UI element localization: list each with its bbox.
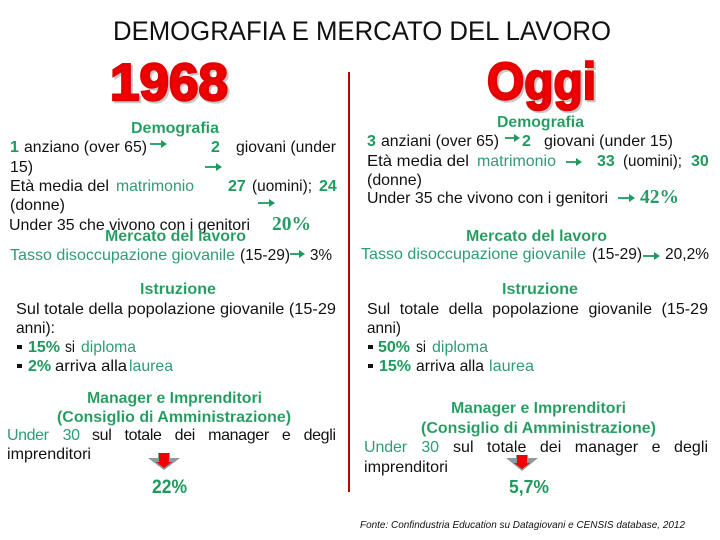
section: manager e imprenditori oggi: (Consiglio di Amministrazione) (421, 420, 656, 437)
section: istruzione oggi: anni) (367, 320, 401, 337)
section: istruzione oggi: diploma (432, 339, 488, 356)
section: istruzione oggi: Sul totale della popolazione giovanile (15-29 (367, 301, 708, 318)
section: demografia oggi: 3 (367, 133, 376, 150)
section: demografia oggi: (donne) (367, 172, 422, 189)
section: istruzione 1968: anni): (16, 320, 55, 337)
section: manager e imprenditori oggi: Manager e Imprenditori (451, 400, 626, 417)
section: demografia 1968: Demografia (131, 120, 219, 137)
section: manager e imprenditori 1968: (Consiglio di Amministrazione) (57, 409, 291, 426)
section: manager e imprenditori oggi: sul totale dei manager e degli (453, 439, 708, 456)
section: demografia 1968: 2 (211, 139, 220, 156)
panel: oggi (361, 53, 709, 497)
section: manager e imprenditori oggi: Under 30 (364, 439, 439, 456)
section: mercato del lavoro oggi: (15-29) (592, 246, 642, 263)
section: demografia 1968: (uomini); (252, 178, 312, 195)
section: istruzione 1968: 15% (28, 339, 60, 356)
section: demografia oggi: giovani (under 15) (544, 133, 673, 150)
section: manager e imprenditori 1968: sul totale dei manager e degli (92, 427, 336, 444)
section: istruzione oggi: si (416, 339, 426, 356)
title: DEMOGRAFIA E MERCATO DEL LAVORO (113, 16, 611, 46)
section: demografia oggi: Under 35 che vivono con i genitori (367, 190, 608, 207)
section: istruzione oggi: arriva alla (416, 358, 484, 375)
section: istruzione 1968: Istruzione (140, 281, 216, 298)
section: istruzione 1968: Sul totale della popolazione giovanile (15-29 (16, 301, 336, 318)
section: manager e imprenditori 1968: Manager e Imprenditori (87, 390, 262, 407)
icon: down arrow (148, 453, 180, 470)
section: manager e imprenditori oggi: 5,7% (509, 477, 549, 497)
section: demografia oggi: 42% (640, 186, 679, 208)
section: demografia 1968: giovani (under (236, 139, 337, 156)
section: mercato del lavoro oggi: Mercato del lavoro (466, 228, 607, 245)
section: istruzione oggi: 50% (378, 339, 410, 356)
section: demografia oggi: 2 (522, 133, 531, 150)
section: mercato del lavoro 1968: Mercato del lavoro (105, 228, 246, 245)
section: demografia 1968: 20% (272, 213, 311, 235)
heading: 1968: 1968 (112, 56, 230, 114)
section: demografia oggi: anziani (over 65) (381, 133, 499, 150)
section: istruzione 1968: arriva alla (55, 358, 127, 375)
section: demografia 1968: Età media del (10, 178, 109, 195)
section: demografia 1968: 15) (10, 159, 33, 176)
section: manager e imprenditori 1968: imprenditori (7, 446, 91, 463)
section: mercato del lavoro 1968 (10, 228, 332, 264)
divider: vertical red line (348, 72, 350, 492)
section: demografia oggi: (uomini); (623, 153, 682, 170)
section: mercato del lavoro 1968: (15-29) (240, 247, 290, 264)
source note: Fonte: Confindustria Education su Datagiovani e CENSIS database, 2012 (360, 519, 685, 531)
section: demografia oggi: Età media del (367, 153, 469, 170)
panel: 1968 (7, 54, 337, 498)
section: demografia 1968: 1 (10, 139, 19, 156)
section: istruzione 1968 (16, 281, 336, 375)
section: manager e imprenditori 1968: Under 30 (7, 427, 80, 444)
section: istruzione oggi (367, 281, 708, 375)
section: demografia 1968: Under 35 che vivono con i genitori (9, 217, 250, 234)
section: istruzione 1968: si (65, 339, 75, 356)
section: demografia oggi (367, 114, 709, 208)
section: istruzione 1968: laurea (129, 358, 173, 375)
section: demografia 1968: anziano (over 65) (24, 139, 147, 156)
section: demografia oggi: 33 (597, 153, 615, 170)
section: demografia 1968 (9, 120, 337, 235)
icon: down arrow (506, 455, 538, 471)
section: mercato del lavoro 1968: 3% (310, 247, 332, 264)
section: mercato del lavoro 1968: Tasso disoccupazione giovanile (10, 247, 235, 264)
section: manager e imprenditori 1968: 22% (152, 477, 187, 498)
section: istruzione oggi: laurea (489, 358, 534, 375)
section: demografia oggi: 30 (691, 153, 709, 170)
section: istruzione oggi: 15% (379, 358, 411, 375)
section: manager e imprenditori oggi (364, 400, 708, 497)
section: demografia oggi: Demografia (497, 114, 584, 131)
section: istruzione 1968: 2% (28, 358, 51, 375)
section: manager e imprenditori 1968 (7, 390, 336, 498)
section: demografia oggi: matrimonio (477, 153, 556, 170)
section: manager e imprenditori oggi: imprenditori (364, 459, 448, 476)
section: demografia 1968: 27 (228, 178, 246, 195)
section: demografia 1968: matrimonio (116, 178, 194, 195)
section: istruzione oggi: Istruzione (502, 281, 578, 298)
section: demografia 1968: (donne) (10, 197, 65, 214)
section: istruzione 1968: diploma (81, 339, 136, 356)
section: mercato del lavoro oggi: Tasso disoccupazione giovanile (361, 246, 586, 263)
section: mercato del lavoro oggi: 20,2% (665, 246, 709, 263)
section: mercato del lavoro oggi (361, 228, 709, 263)
heading: oggi: Oggi (487, 53, 596, 111)
heading: 1968: 1968 (110, 54, 228, 112)
heading: oggi: Oggi (489, 55, 598, 113)
section: demografia 1968: 24 (319, 178, 337, 195)
